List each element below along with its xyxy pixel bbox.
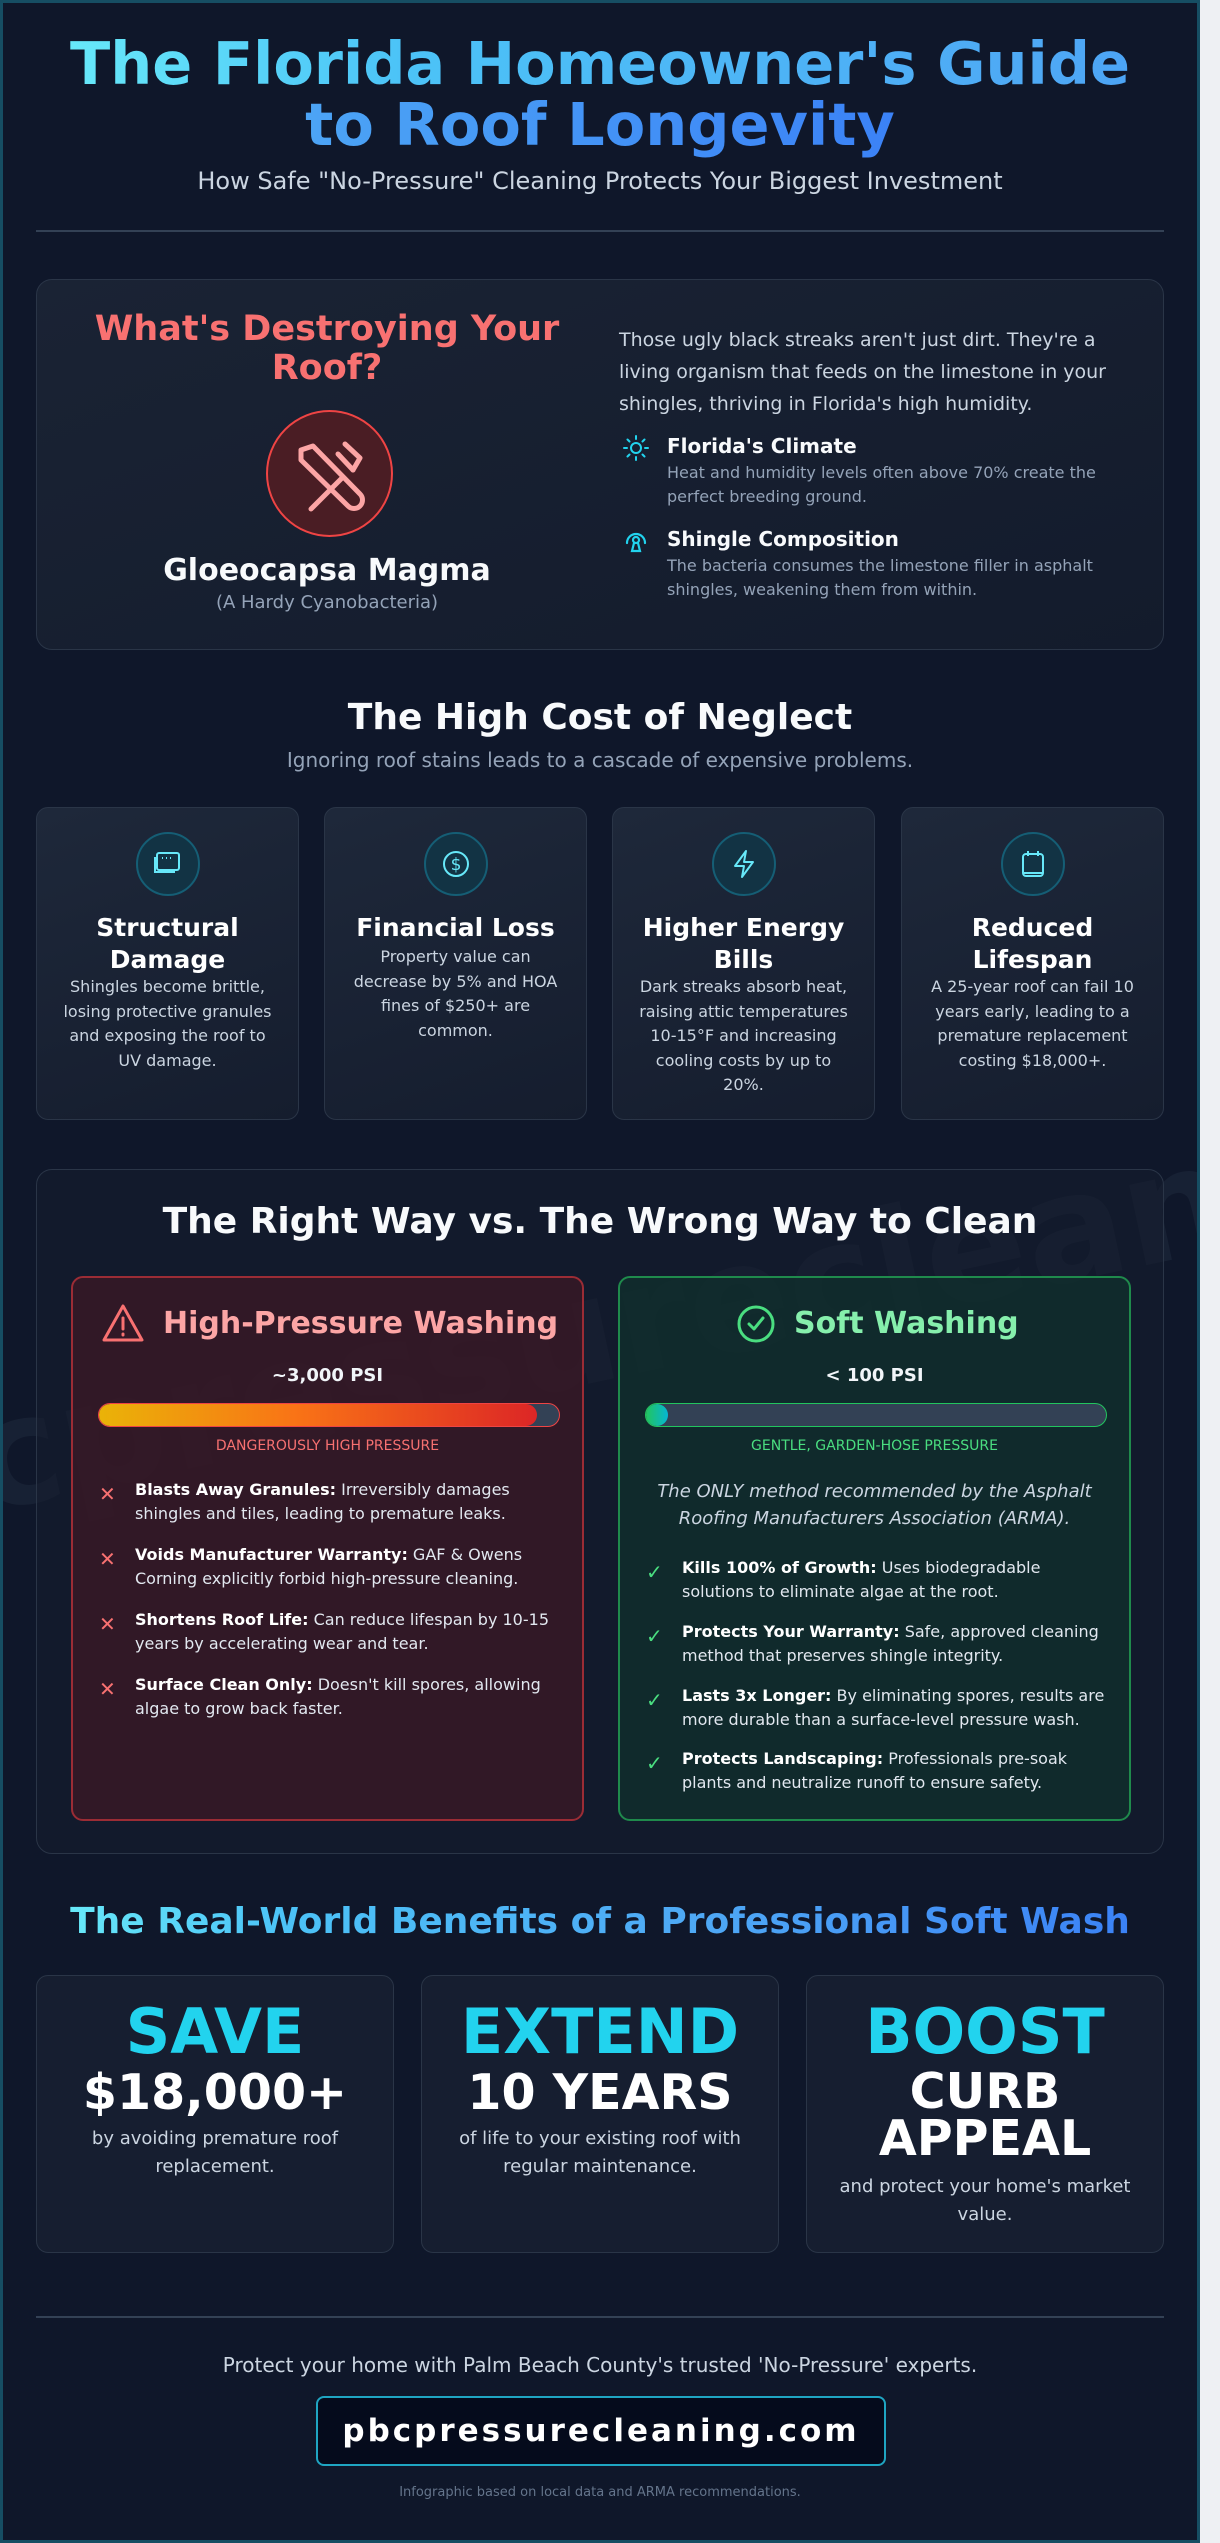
- psi label: < 100 PSI: [825, 1365, 924, 1386]
- con list: [99, 1480, 549, 1718]
- pro list: ✓: [646, 1688, 663, 1712]
- card: structural damage: Structural: [96, 913, 239, 942]
- psi label: ~3,000 PSI: [272, 1365, 383, 1386]
- card: boost: [806, 1975, 1164, 2253]
- item: shingle composition: The bacteria consumes the limestone filler in asphalt shingles, weakening them from within.: [667, 556, 1093, 599]
- heading: what's destroying: What's Destroying Your: [95, 309, 559, 349]
- quote: The ONLY method recommended by the Asphalt Roofing Manufacturers Association (ARMA).: [657, 1481, 1092, 1529]
- panel: what's destroying your roof: [36, 279, 1164, 650]
- con list: Blasts Away Granules: Irreversibly damages shingles and tiles, leading to premature leaks.: [135, 1480, 510, 1523]
- card: extend: of life to your existing roof with regular maintenance.: [459, 2128, 741, 2177]
- item: climate: Heat and humidity levels often above 70% create the perfect breeding ground.: [667, 463, 1096, 506]
- card: boost: APPEAL: [879, 2110, 1091, 2167]
- heading: what's destroying: [95, 309, 560, 388]
- pro list: ✓: [646, 1751, 663, 1775]
- heading: what's destroying: Roof?: [272, 348, 382, 388]
- heading: benefits: The Real-World Benefits of a Professional Soft Wash: [70, 1901, 1130, 1942]
- url button: pbcpressurecleaning.com: [342, 2413, 860, 2449]
- con list: Surface Clean Only: Doesn't kill spores, allowing algae to grow back faster.: [135, 1675, 541, 1718]
- bar caption: GENTLE, GARDEN-HOSE PRESSURE: [751, 1438, 998, 1454]
- footer text: Protect your home with Palm Beach County's trusted 'No-Pressure' experts.: [223, 2353, 977, 2377]
- icon: tower: [626, 532, 646, 552]
- card: save: $18,000+: [83, 2064, 347, 2121]
- organism subtitle: (A Hardy Cyanobacteria): [216, 592, 438, 613]
- title: to Roof Longevity: [305, 90, 895, 159]
- item: shingle composition: [626, 527, 1093, 599]
- con list: Shortens Roof Life: Can reduce lifespan by 10-15 years by accelerating wear and tear.: [135, 1610, 549, 1653]
- header: Soft Washing: [794, 1306, 1019, 1341]
- heading: The Right Way vs. The Wrong Way to Clean: [163, 1201, 1037, 1242]
- url button: [316, 2396, 886, 2466]
- card: structural damage: [36, 807, 299, 1120]
- subtitle: How Safe "No-Pressure" Cleaning Protects Your Biggest Investment: [197, 167, 1003, 195]
- card: boost: CURB: [910, 2063, 1060, 2120]
- card: save: by avoiding premature roof replacement.: [92, 2128, 338, 2177]
- con list: ✕: [99, 1677, 116, 1701]
- card: boost: BOOST: [865, 1995, 1105, 2068]
- con list: ✕: [99, 1482, 116, 1506]
- icon: sun: [623, 435, 649, 461]
- pro list: Protects Landscaping: Professionals pre-soak plants and neutralize runoff to ensure safety.: [682, 1749, 1067, 1792]
- card: extend: EXTEND: [461, 1995, 739, 2068]
- pro list: Protects Your Warranty: Safe, approved cleaning method that preserves shingle integrity.: [682, 1622, 1099, 1665]
- icon: dollar: [424, 832, 488, 896]
- item: shingle composition: Shingle Composition: [667, 527, 899, 551]
- icon: calendar: [1001, 832, 1065, 896]
- card: extend: [421, 1975, 779, 2253]
- pro list: Kills 100% of Growth: Uses biodegradable solutions to eliminate algae at the root.: [682, 1558, 1040, 1601]
- title: [70, 29, 1130, 159]
- card: reduced lifespan: [901, 807, 1164, 1120]
- pressure bar: [98, 1403, 560, 1427]
- card: higher energy bills: Higher Energy: [643, 913, 844, 942]
- card: higher energy bills: Bills: [714, 945, 773, 974]
- card: extend: 10 YEARS: [467, 2064, 733, 2121]
- item: climate: [623, 434, 1096, 506]
- pro list: ✓: [646, 1624, 663, 1648]
- card: reduced lifespan: A 25-year roof can fail 10 years early, leading to a premature replacement costing $18,000+.: [931, 977, 1134, 1070]
- header: High-Pressure Washing: [163, 1306, 558, 1341]
- card: financial loss: [324, 807, 587, 1120]
- intro paragraph: Those ugly black streaks aren't just dirt. They're a living organism that feeds on the limestone in your shingles, thriving in Florida's high humidity.: [619, 329, 1106, 415]
- heading: high cost of neglect: The High Cost of Neglect: [348, 697, 852, 738]
- pro list: Lasts 3x Longer: By eliminating spores, results are more durable than a surface-level pressure wash.: [682, 1686, 1104, 1729]
- card: save: [36, 1975, 394, 2253]
- organism name: Gloeocapsa Magma: [163, 553, 491, 588]
- card: financial loss: Property value can decrease by 5% and HOA fines of $250+ are common.: [354, 947, 557, 1040]
- card: structural damage: Damage: [110, 945, 225, 974]
- panel: high-pressure washing: [71, 1276, 584, 1821]
- title: The Florida Homeowner's Guide: [70, 29, 1130, 98]
- card: save: SAVE: [126, 1995, 304, 2068]
- subheading: Ignoring roof stains leads to a cascade of expensive problems.: [287, 748, 913, 772]
- con list: Voids Manufacturer Warranty: GAF & Owens Corning explicitly forbid high-pressure cleaning.: [135, 1545, 522, 1588]
- pro list: [646, 1558, 1104, 1792]
- card: structural damage: Shingles become brittle, losing protective granules and exposing the roof to UV damage.: [63, 977, 272, 1070]
- icon: bacteria: [266, 410, 393, 537]
- panel: right way vs wrong way: [36, 1169, 1164, 1854]
- card: reduced lifespan: Lifespan: [973, 945, 1092, 974]
- icon: lightning: [712, 832, 776, 896]
- item: climate: Florida's Climate: [667, 434, 857, 458]
- card: higher energy bills: [612, 807, 875, 1120]
- pressure bar: [645, 1403, 1107, 1427]
- con list: ✕: [99, 1547, 116, 1571]
- icon: dollar: $: [451, 855, 461, 875]
- card: boost: and protect your home's market value.: [840, 2176, 1130, 2225]
- bar caption: DANGEROUSLY HIGH PRESSURE: [216, 1438, 439, 1454]
- icon: check circle: [738, 1306, 774, 1342]
- card: financial loss: Financial Loss: [356, 913, 555, 942]
- con list: ✕: [99, 1612, 116, 1636]
- icon: shingles: [136, 832, 200, 896]
- panel: soft washing: [618, 1276, 1131, 1821]
- pro list: ✓: [646, 1560, 663, 1584]
- disclaimer: Infographic based on local data and ARMA recommendations.: [399, 2485, 801, 2500]
- icon: warning: [102, 1304, 144, 1342]
- card: reduced lifespan: Reduced: [972, 913, 1093, 942]
- card: higher energy bills: Dark streaks absorb heat, raising attic temperatures 10-15°F and increasing cooling costs by up to 20%.: [639, 977, 848, 1094]
